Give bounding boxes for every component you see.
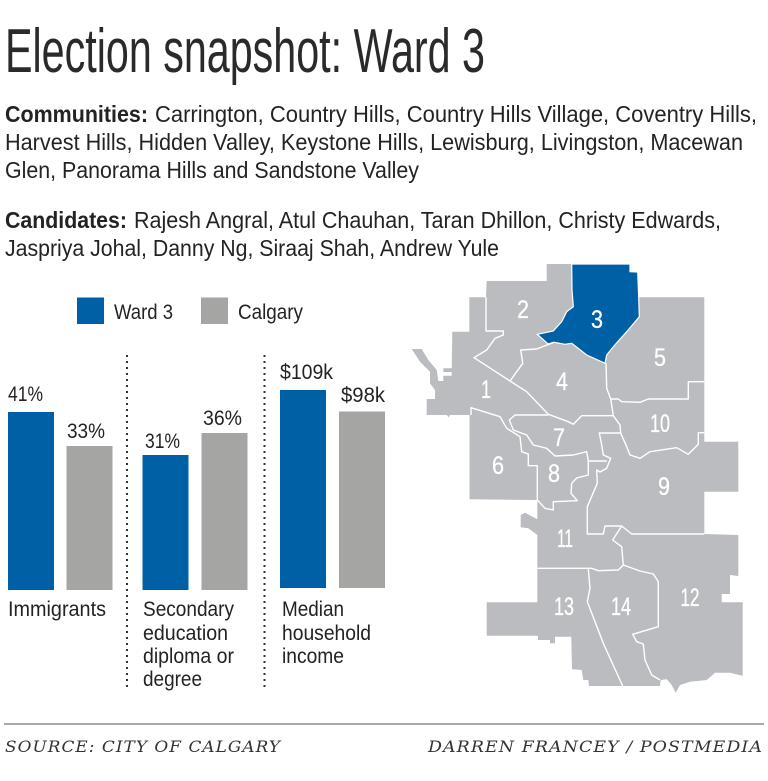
legend: Ward 3 [114,301,173,324]
ward numbers: 11 [557,525,573,553]
ward numbers: 13 [554,593,574,621]
candidates text block: Candidates: [5,207,127,233]
ward numbers [481,296,700,621]
ward numbers: 14 [611,593,631,621]
title: Election snapshot: Ward 3 [5,17,485,86]
bar chart: secondary education: 36% [203,407,242,430]
map silhouette [412,264,743,693]
author credit: DARREN FRANCEY / POSTMEDIA [427,737,763,756]
ward numbers: 6 [492,452,504,480]
bar chart: immigrants [8,383,112,621]
ward boundaries [471,297,704,686]
bar chart: immigrants: Immigrants [8,598,106,621]
communities text block [5,101,757,183]
bar chart: secondary education: Secondary [143,598,234,621]
communities text block: Carrington, Country Hills, Country Hills Village, Coventry Hills, [155,101,757,127]
bar chart: median household income: income [282,645,344,668]
candidates text block [5,207,721,261]
ward numbers: 4 [556,368,568,396]
bar chart: secondary education: education [143,622,228,645]
bar chart: median household income: $109k [280,361,333,384]
bar chart: median household income [280,361,385,668]
ward numbers: 7 [553,424,565,452]
communities text block: Harvest Hills, Hidden Valley, Keystone Hills, Lewisburg, Livingston, Macewan [5,129,743,155]
bar chart: median household income: $98k [341,384,385,407]
ward numbers: 9 [658,473,670,501]
bar chart: secondary education: 31% [145,430,180,453]
bar chart: immigrants: 33% [67,420,105,443]
ward numbers: 8 [548,460,560,488]
candidates text block: Rajesh Angral, Atul Chauhan, Taran Dhillon, Christy Edwards, [134,207,721,233]
source credit: SOURCE: CITY OF CALGARY [5,737,281,756]
bar chart: secondary education [142,407,248,691]
bar chart: secondary education: degree [143,668,202,691]
communities text block: Glen, Panorama Hills and Sandstone Valley [5,157,419,183]
ward map of Calgary [412,264,743,693]
ward numbers: 3 [591,306,603,334]
bar chart: immigrants: 41% [8,383,43,406]
ward 3 highlighted [537,264,639,363]
ward numbers: 10 [650,410,670,438]
legend [77,298,303,324]
bar chart: median household income: Median [282,598,344,621]
candidates text block: Jaspriya Johal, Danny Ng, Siraaj Shah, Andrew Yule [5,235,499,261]
legend: Calgary [238,301,303,324]
bar chart: secondary education: diploma or [143,645,234,668]
ward numbers: 2 [517,296,529,324]
ward numbers: 12 [680,584,700,612]
bar chart: median household income: household [282,622,371,645]
footer rule [4,723,764,725]
ward numbers: 1 [481,376,491,404]
communities text block: Communities: [5,101,148,127]
ward numbers: 5 [654,344,666,372]
